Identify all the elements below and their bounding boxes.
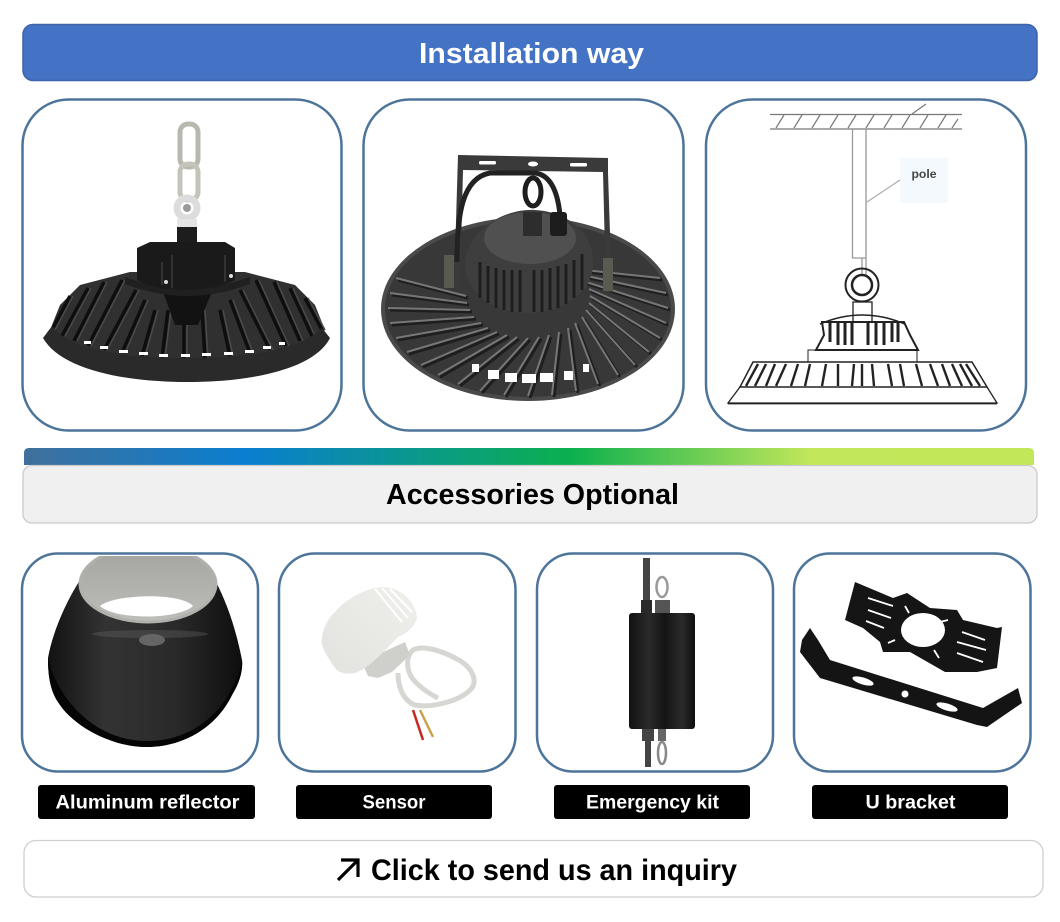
icon: finned driver housing <box>465 210 593 313</box>
call to action: inquiry button <box>24 840 1043 897</box>
icon: emergency kit cylinder <box>629 558 695 767</box>
panel: chain-hung high bay light <box>22 100 342 430</box>
ceiling <box>770 104 962 129</box>
icon: reflector <box>48 546 242 747</box>
icon: UFO lamp body with fins <box>43 242 330 382</box>
label: U bracket: U bracket <box>866 792 956 814</box>
icon: U strap <box>800 628 1022 727</box>
icon: arrow <box>338 860 358 880</box>
heading: Accessories Optional: Accessories Optional <box>386 479 679 511</box>
panel: bracket-mounted high bay light <box>364 100 684 430</box>
header: Installation way <box>23 24 1037 80</box>
label: U bracket <box>812 785 1008 819</box>
label: Emergency kit <box>554 785 750 819</box>
gradient divider bar <box>24 448 1034 465</box>
icon: U bracket and cable <box>444 155 613 292</box>
panel: emergency kit <box>537 554 773 772</box>
label: Emergency kit: Emergency kit <box>586 792 720 814</box>
label: Aluminum reflector: Aluminum reflector <box>56 792 240 814</box>
icon: mounting plate <box>845 582 1002 672</box>
callout: pole label: pole <box>912 167 937 181</box>
header: Installation way: Installation way <box>419 38 644 70</box>
label: Aluminum reflector <box>38 785 255 819</box>
heading: Accessories Optional <box>23 466 1037 523</box>
panel: aluminum reflector <box>22 546 258 772</box>
icon: lamp line drawing <box>728 268 997 404</box>
callout: pole label <box>867 158 948 203</box>
pole <box>852 129 866 275</box>
panel: pole mounting line drawing <box>706 100 1026 430</box>
label: Sensor <box>296 785 492 819</box>
call to action: inquiry button: Click to send us an inquiry <box>371 854 737 887</box>
icon: chain and eye ring <box>177 124 198 245</box>
panel: sensor <box>279 554 516 772</box>
icon: round lamp disc with radial fins <box>381 217 675 401</box>
icon: sensor with cable <box>322 587 474 740</box>
label: Sensor: Sensor <box>362 792 426 814</box>
panel: U bracket <box>794 554 1030 772</box>
